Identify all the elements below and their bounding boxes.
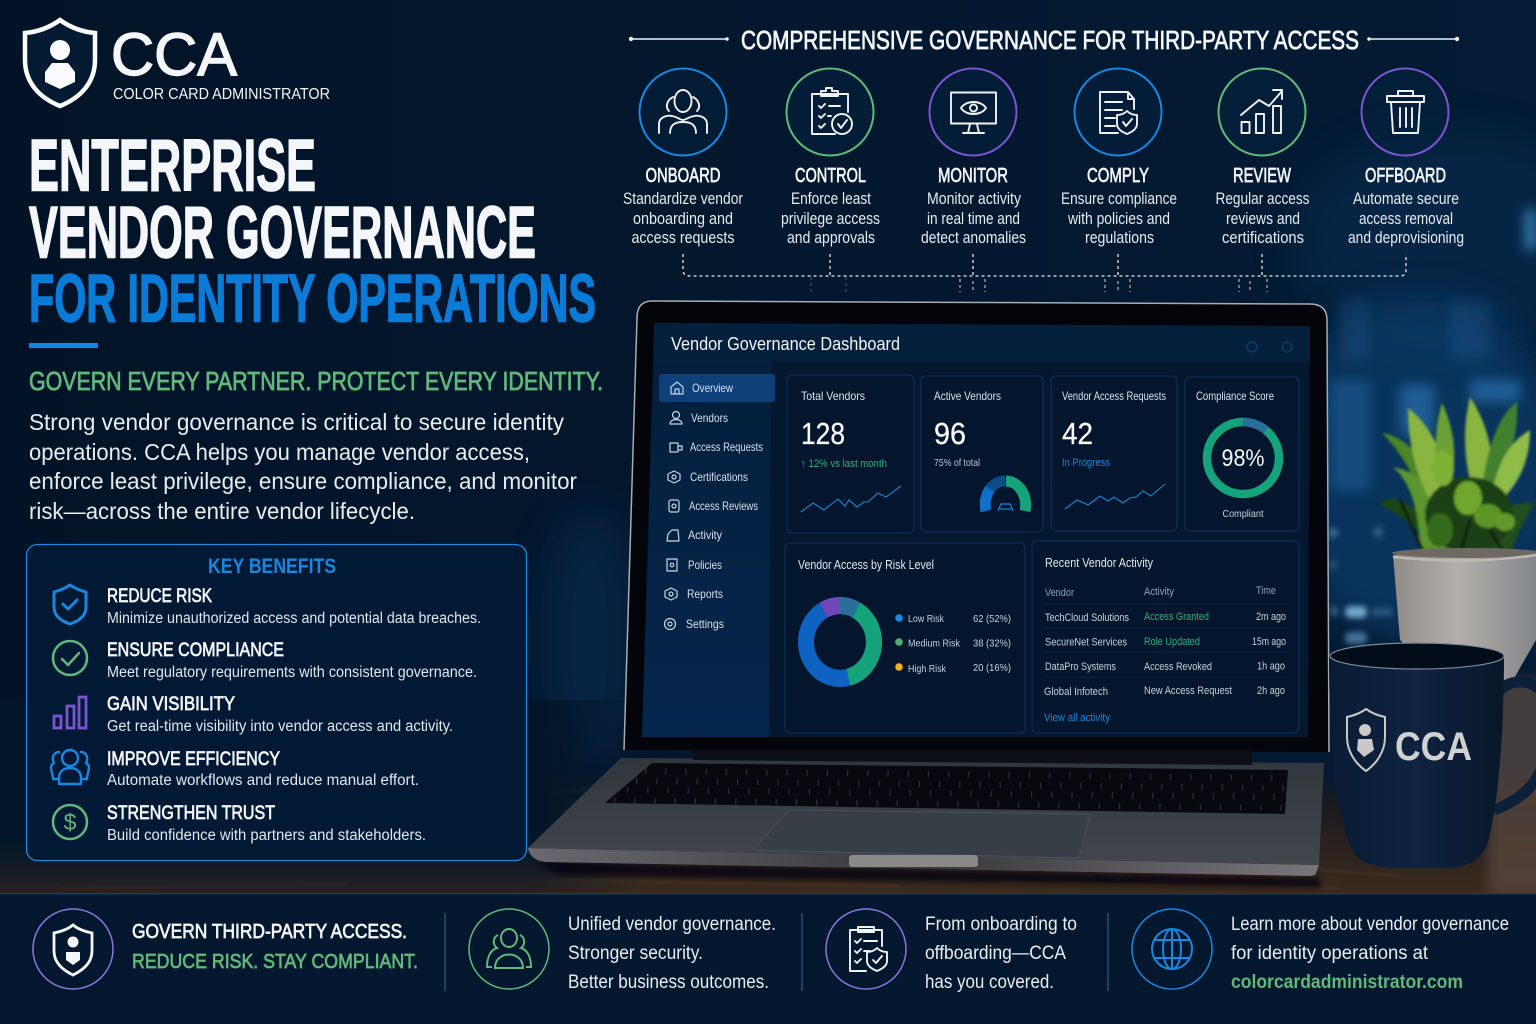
sparkline: access requests bbox=[1065, 484, 1165, 509]
legend: 62 (52%) bbox=[973, 613, 1011, 625]
icon: chart arrow bbox=[1218, 68, 1306, 156]
step: onboard: onboarding and bbox=[633, 209, 733, 228]
benefit: gain visibility: GAIN VISIBILITY bbox=[107, 694, 235, 715]
table: recent vendor activity: DataPro Systems bbox=[1045, 661, 1116, 673]
legend: Low Risk bbox=[908, 613, 945, 625]
step: onboard: access requests bbox=[632, 228, 734, 247]
card: active vendors: Active Vendors bbox=[934, 389, 1001, 403]
icon: dollar circle bbox=[53, 805, 87, 839]
nav: access reviews bbox=[669, 499, 758, 513]
card: compliance score bbox=[1185, 377, 1299, 531]
icon: footer clipboard bbox=[826, 909, 906, 989]
step: control: Enforce least bbox=[791, 189, 871, 208]
table: recent vendor activity: 15m ago bbox=[1252, 636, 1286, 648]
card: active vendors: 96 bbox=[934, 416, 966, 451]
nav: access requests: Access Requests bbox=[690, 440, 763, 454]
footer band bbox=[0, 893, 1536, 1024]
card: compliance score: Compliance Score bbox=[1196, 389, 1274, 403]
card: total vendors bbox=[787, 375, 914, 533]
header: Vendor Governance Dashboard bbox=[671, 334, 900, 354]
benefit: improve efficiency: Automate workflows and reduce manual effort. bbox=[107, 772, 419, 789]
intro text block: risk—across the entire vendor lifecycle. bbox=[29, 498, 415, 524]
icon: shield check bbox=[54, 585, 86, 624]
icon: monitor eye bbox=[930, 68, 1016, 156]
main heading: FOR IDENTITY OPERATIONS bbox=[29, 260, 596, 336]
table: recent vendor activity: Recent Vendor Activity bbox=[1045, 556, 1154, 570]
footer item: learn more bbox=[1132, 909, 1509, 993]
step: review bbox=[1216, 68, 1310, 247]
icon: check circle bbox=[53, 641, 87, 675]
nav: vendors: Vendors bbox=[691, 411, 728, 425]
footer item: lifecycle: offboarding—CCA bbox=[925, 943, 1066, 964]
legend bbox=[895, 613, 1011, 675]
benefit: ensure compliance: ENSURE COMPLIANCE bbox=[107, 640, 284, 661]
laptop shadow bbox=[535, 862, 1320, 888]
footer item: lifecycle: has you covered. bbox=[925, 972, 1054, 993]
step: onboard: ONBOARD bbox=[646, 165, 720, 187]
intro text block: Strong vendor governance is critical to secure identity bbox=[29, 409, 564, 435]
icon: control clipboard bbox=[786, 68, 874, 156]
benefit: strengthen trust: STRENGTHEN TRUST bbox=[107, 803, 275, 824]
nav: access reviews: Access Reviews bbox=[689, 499, 758, 513]
table: recent vendor activity: Vendor bbox=[1045, 587, 1074, 599]
intro text block: operations. CCA helps you manage vendor access, bbox=[29, 439, 530, 465]
panel: key benefits bbox=[26, 544, 526, 860]
step: comply: COMPLY bbox=[1087, 165, 1149, 187]
step: review: Regular access bbox=[1216, 189, 1310, 208]
sparkline: total vendors bbox=[801, 486, 901, 512]
step: control bbox=[781, 68, 880, 247]
table: recent vendor activity: 2m ago bbox=[1256, 611, 1286, 623]
step: monitor: MONITOR bbox=[938, 165, 1008, 187]
step: monitor: in real time and bbox=[927, 209, 1020, 228]
card: compliance score: Compliant bbox=[1222, 508, 1264, 520]
card: total vendors: Total Vendors bbox=[801, 389, 865, 403]
nav: policies: Policies bbox=[688, 558, 722, 572]
card: vendor access requests: Vendor Access Requests bbox=[1062, 389, 1166, 403]
step: monitor: detect anomalies bbox=[921, 228, 1026, 247]
step: offboard: access removal bbox=[1359, 209, 1453, 228]
card: active vendors: 75% of total bbox=[934, 457, 980, 469]
table: recent vendor activity: TechCloud Solutions bbox=[1045, 612, 1129, 624]
laptop bbox=[528, 301, 1329, 888]
benefit: improve efficiency: IMPROVE EFFICIENCY bbox=[107, 749, 280, 770]
card: vendor access requests bbox=[1051, 376, 1177, 531]
step: monitor bbox=[921, 68, 1026, 247]
table: recent vendor activity: Role Updated bbox=[1144, 636, 1200, 648]
mug logo: CCA bbox=[1395, 725, 1472, 769]
laptop lid bbox=[624, 301, 1329, 765]
decor: plant pot bbox=[1380, 397, 1536, 680]
chart: vendor access by risk level: Vendor Access by Risk Level bbox=[798, 558, 934, 572]
benefit: ensure compliance: Meet regulatory requirements with consistent governance. bbox=[107, 664, 477, 681]
step: control: and approvals bbox=[787, 228, 875, 247]
step: offboard: OFFBOARD bbox=[1365, 165, 1446, 187]
nav: activity bbox=[667, 528, 722, 542]
step: comply: regulations bbox=[1085, 228, 1154, 247]
table: recent vendor activity bbox=[1032, 541, 1299, 733]
icon: trash can bbox=[1362, 68, 1448, 156]
logo subtitle: COLOR CARD ADMINISTRATOR bbox=[113, 86, 330, 103]
footer item: learn more: for identity operations at bbox=[1231, 943, 1429, 964]
mug bbox=[1329, 643, 1536, 868]
header bbox=[654, 323, 1310, 362]
footer item: lifecycle: From onboarding to bbox=[925, 914, 1077, 935]
mug logo bbox=[1347, 709, 1472, 771]
heading: comprehensive governance: COMPREHENSIVE GOVERNANCE FOR THIRD-PARTY ACCESS bbox=[741, 25, 1359, 55]
legend: 20 (16%) bbox=[973, 662, 1011, 674]
footer item: govern: REDUCE RISK. STAY COMPLIANT. bbox=[132, 951, 418, 973]
table: recent vendor activity: New Access Request bbox=[1144, 685, 1232, 697]
laptop base bbox=[528, 758, 1324, 876]
logo bbox=[25, 20, 330, 106]
gauge bbox=[985, 481, 1026, 511]
icon: onboard people bbox=[640, 68, 726, 156]
heading: key benefits: KEY BENEFITS bbox=[208, 555, 336, 578]
legend: 38 (32%) bbox=[973, 638, 1011, 650]
donut: compliance bbox=[1207, 422, 1279, 494]
icon: dollar circle: $ bbox=[64, 809, 77, 835]
benefit: strengthen trust: Build confidence with partners and stakeholders. bbox=[107, 827, 426, 844]
sidebar bbox=[642, 323, 1310, 737]
step: comply bbox=[1061, 68, 1177, 247]
footer item: govern: GOVERN THIRD-PARTY ACCESS. bbox=[132, 921, 407, 943]
connector: dashed lines bbox=[683, 254, 1406, 292]
icon: footer people bbox=[469, 909, 549, 989]
card: vendor access requests: 42 bbox=[1062, 416, 1093, 451]
card: total vendors: 128 bbox=[801, 416, 845, 451]
nav: certifications: Certifications bbox=[690, 470, 748, 484]
benefit: gain visibility bbox=[107, 694, 453, 735]
icon: bars bbox=[54, 697, 86, 728]
step: review: certifications bbox=[1222, 228, 1304, 247]
tagline: GOVERN EVERY PARTNER. PROTECT EVERY IDENTITY. bbox=[29, 366, 603, 396]
chart: vendor access by risk level bbox=[785, 543, 1025, 733]
step: review: reviews and bbox=[1226, 209, 1300, 228]
benefit: gain visibility: Get real-time visibility into vendor access and activity. bbox=[107, 718, 453, 735]
dashboard screen bbox=[642, 323, 1310, 737]
step: offboard: Automate secure bbox=[1353, 189, 1459, 208]
main heading bbox=[29, 126, 596, 336]
logo wordmark: CCA bbox=[111, 21, 237, 88]
table: recent vendor activity: Global Infotech bbox=[1044, 686, 1108, 698]
benefit: reduce risk bbox=[107, 586, 481, 627]
step: comply: with policies and bbox=[1067, 209, 1170, 228]
table: recent vendor activity: Access Granted bbox=[1144, 611, 1209, 623]
nav: access requests bbox=[670, 440, 763, 454]
table: recent vendor activity: Time bbox=[1256, 585, 1276, 597]
nav: settings: Settings bbox=[686, 617, 724, 631]
nav: overview: Overview bbox=[692, 381, 733, 395]
icon: people bbox=[51, 750, 89, 784]
icon: footer shield bbox=[33, 909, 113, 989]
legend: High Risk bbox=[908, 663, 947, 675]
wood desk bbox=[0, 680, 1536, 895]
footer item: unified bbox=[469, 909, 776, 993]
benefit: improve efficiency bbox=[107, 749, 419, 789]
table: recent vendor activity: Access Revoked bbox=[1144, 661, 1212, 673]
legend: Medium Risk bbox=[908, 638, 961, 650]
table: recent vendor activity: 1h ago bbox=[1257, 660, 1285, 672]
intro text block: enforce least privilege, ensure compliance, and monitor bbox=[29, 468, 577, 494]
step: comply: Ensure compliance bbox=[1061, 189, 1177, 208]
benefit: strengthen trust bbox=[107, 803, 426, 844]
icon: shield logo bbox=[25, 20, 95, 106]
intro text block bbox=[29, 409, 577, 524]
table: recent vendor activity: Activity bbox=[1144, 586, 1174, 598]
nav: settings bbox=[664, 617, 724, 631]
benefit: ensure compliance bbox=[107, 640, 477, 681]
step: control: CONTROL bbox=[795, 165, 866, 187]
nav: policies bbox=[667, 558, 722, 572]
step: offboard bbox=[1348, 68, 1464, 247]
nav: vendors bbox=[670, 411, 728, 425]
step: monitor: Monitor activity bbox=[927, 189, 1021, 208]
footer item: learn more: colorcardadministrator.com bbox=[1231, 972, 1463, 993]
footer item: lifecycle bbox=[826, 909, 1077, 993]
nav: reports: Reports bbox=[687, 587, 723, 601]
icon: plant leaves bbox=[1380, 397, 1535, 555]
main heading: VENDOR GOVERNANCE bbox=[29, 192, 536, 274]
table: recent vendor activity: 2h ago bbox=[1257, 685, 1285, 697]
footer item: unified: Stronger security. bbox=[568, 943, 703, 964]
nav: certifications bbox=[668, 470, 748, 484]
benefit: reduce risk: REDUCE RISK bbox=[107, 586, 212, 607]
table: recent vendor activity: View all activity bbox=[1044, 712, 1110, 724]
card: total vendors: ↑ 12% vs last month bbox=[801, 458, 887, 470]
benefit: reduce risk: Minimize unauthorized access and potential data breaches. bbox=[107, 610, 481, 627]
table: recent vendor activity: SecureNet Services bbox=[1045, 636, 1127, 648]
step: offboard: and deprovisioning bbox=[1348, 228, 1464, 247]
card: vendor access requests: In Progress bbox=[1062, 457, 1110, 469]
nav: activity: Activity bbox=[688, 528, 722, 542]
footer item: govern bbox=[33, 909, 418, 989]
step: review: REVIEW bbox=[1233, 165, 1291, 187]
step: control: privilege access bbox=[781, 209, 880, 228]
step: onboard: Standardize vendor bbox=[623, 189, 743, 208]
main heading: ENTERPRISE bbox=[29, 126, 316, 206]
nav: reports bbox=[665, 587, 723, 601]
donut: risk bbox=[806, 606, 874, 678]
step: onboard bbox=[623, 68, 743, 247]
nav: overview bbox=[671, 381, 733, 395]
card: compliance score: 98% bbox=[1222, 445, 1264, 472]
footer item: unified: Unified vendor governance. bbox=[568, 914, 776, 935]
card: active vendors bbox=[921, 376, 1043, 532]
footer item: unified: Better business outcomes. bbox=[568, 972, 769, 993]
icon: document shield bbox=[1074, 68, 1162, 156]
icon: globe bbox=[1132, 909, 1212, 989]
